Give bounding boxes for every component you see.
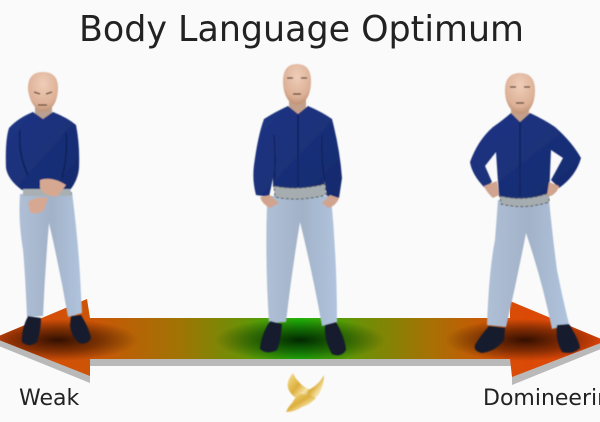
foot shadow: centre — [220, 319, 380, 359]
belt — [500, 193, 549, 207]
head — [505, 73, 535, 114]
figure: domineering posture — [470, 73, 581, 353]
foot shadow: left — [0, 319, 138, 361]
shirt — [253, 106, 342, 198]
shoes — [260, 321, 346, 355]
figure: weak posture — [6, 72, 91, 345]
right wing — [306, 375, 324, 400]
head — [283, 64, 311, 104]
hands — [260, 195, 339, 208]
shoes — [22, 315, 91, 345]
title: Body Language Optimum — [79, 9, 524, 50]
body and tail — [286, 394, 316, 412]
arrow body — [0, 299, 600, 377]
arrow shadow — [0, 340, 600, 385]
left wing — [288, 373, 310, 401]
belt — [274, 184, 326, 199]
shirt — [6, 112, 79, 195]
double-headed gradient arrow — [0, 299, 600, 385]
shirt folds — [274, 114, 325, 186]
shoes — [475, 324, 580, 353]
figure: balanced posture — [253, 64, 346, 355]
trousers — [19, 192, 82, 317]
trousers — [266, 196, 337, 326]
shirt folds — [20, 130, 67, 178]
belt — [23, 189, 72, 196]
foot shadows clipped to the arrow — [0, 318, 600, 362]
trousers — [487, 200, 569, 329]
hands — [484, 181, 559, 198]
foot shadow: right — [445, 319, 600, 361]
neck — [35, 102, 52, 126]
icon: golden dove — [286, 373, 324, 412]
facial features — [510, 87, 530, 103]
shirt — [470, 113, 581, 200]
shirt folds — [519, 122, 521, 196]
label: weak: Weak — [19, 386, 79, 411]
facial features — [34, 92, 52, 105]
neck — [511, 105, 529, 130]
hands — [28, 179, 66, 214]
head — [28, 72, 58, 112]
facial features — [287, 78, 307, 94]
neck — [289, 95, 306, 120]
